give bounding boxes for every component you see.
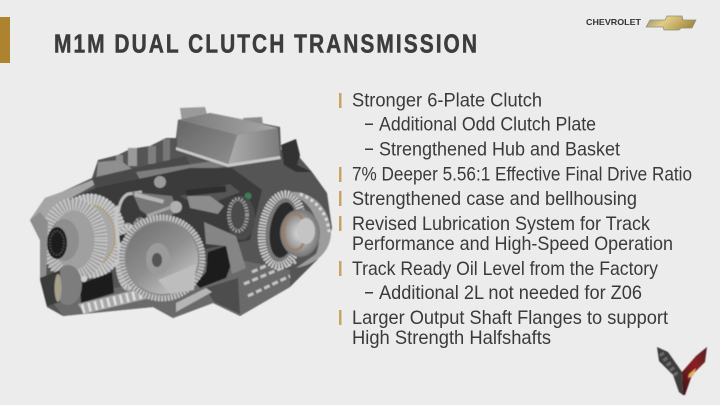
oil pan	[47, 256, 296, 318]
sub-bullet: additional oil: Additional 2L not needed for Z06	[379, 282, 642, 304]
right wing	[682, 347, 707, 395]
checker pattern	[661, 353, 677, 376]
icon: bowtie	[646, 16, 696, 30]
bullet: lubrication	[339, 213, 673, 255]
oil cooler	[176, 107, 281, 167]
upper gearbox interior	[64, 168, 262, 250]
clutch tone ring	[254, 188, 310, 272]
interior mechanical parts	[118, 176, 255, 240]
case silhouette	[30, 113, 332, 318]
sensor bracket	[281, 139, 312, 172]
bullet: oil level: Track Ready Oil Level from the Factory	[352, 258, 658, 280]
corvette crossed flags logo	[657, 347, 707, 395]
emblem	[688, 368, 696, 378]
feature list	[339, 90, 692, 349]
rear helical gear	[54, 194, 126, 278]
housing top ribs and posts	[30, 139, 170, 222]
gold accent bar	[0, 17, 10, 63]
mounting plate	[176, 147, 281, 167]
oil tube	[112, 206, 120, 266]
title: M1M DUAL CLUTCH TRANSMISSION	[54, 28, 479, 58]
starter motor hub	[40, 265, 87, 306]
bullet: output flanges: High Strength Halfshafts	[352, 327, 551, 349]
transmission illustration	[30, 107, 332, 318]
wordmark: CHEVROLET	[586, 17, 642, 27]
shift fork	[118, 226, 152, 243]
bellhousing	[280, 192, 331, 268]
large final drive gear	[119, 215, 205, 301]
left case edge	[30, 212, 48, 282]
top face	[178, 113, 278, 135]
connectors	[180, 107, 208, 122]
bullet: stronger clutch: Stronger 6-Plate Clutch	[352, 90, 542, 112]
black shroud	[196, 246, 232, 288]
bullet: lubrication: Performance and High-Speed Operation	[352, 233, 673, 255]
lower mid casting	[204, 222, 246, 274]
front helical gear	[42, 199, 106, 281]
bullet: case: Strengthened case and bellhousing	[352, 188, 637, 210]
bullet: output flanges: Larger Output Shaft Flanges to support	[352, 307, 669, 329]
left wing	[657, 347, 683, 395]
bullet: output flanges	[339, 307, 669, 349]
top beam	[92, 156, 190, 190]
sub-bullet: clutch plate: Additional Odd Clutch Plate	[379, 114, 596, 136]
left face	[177, 120, 237, 165]
black actuator block	[80, 272, 114, 303]
chevrolet logo	[586, 16, 696, 30]
right face	[228, 128, 280, 165]
sub-bullet: hub and basket: Strengthened Hub and Basket	[379, 139, 621, 161]
bullet: lubrication: Revised Lubrication System for Track	[352, 213, 650, 235]
middle small gears	[115, 217, 150, 291]
